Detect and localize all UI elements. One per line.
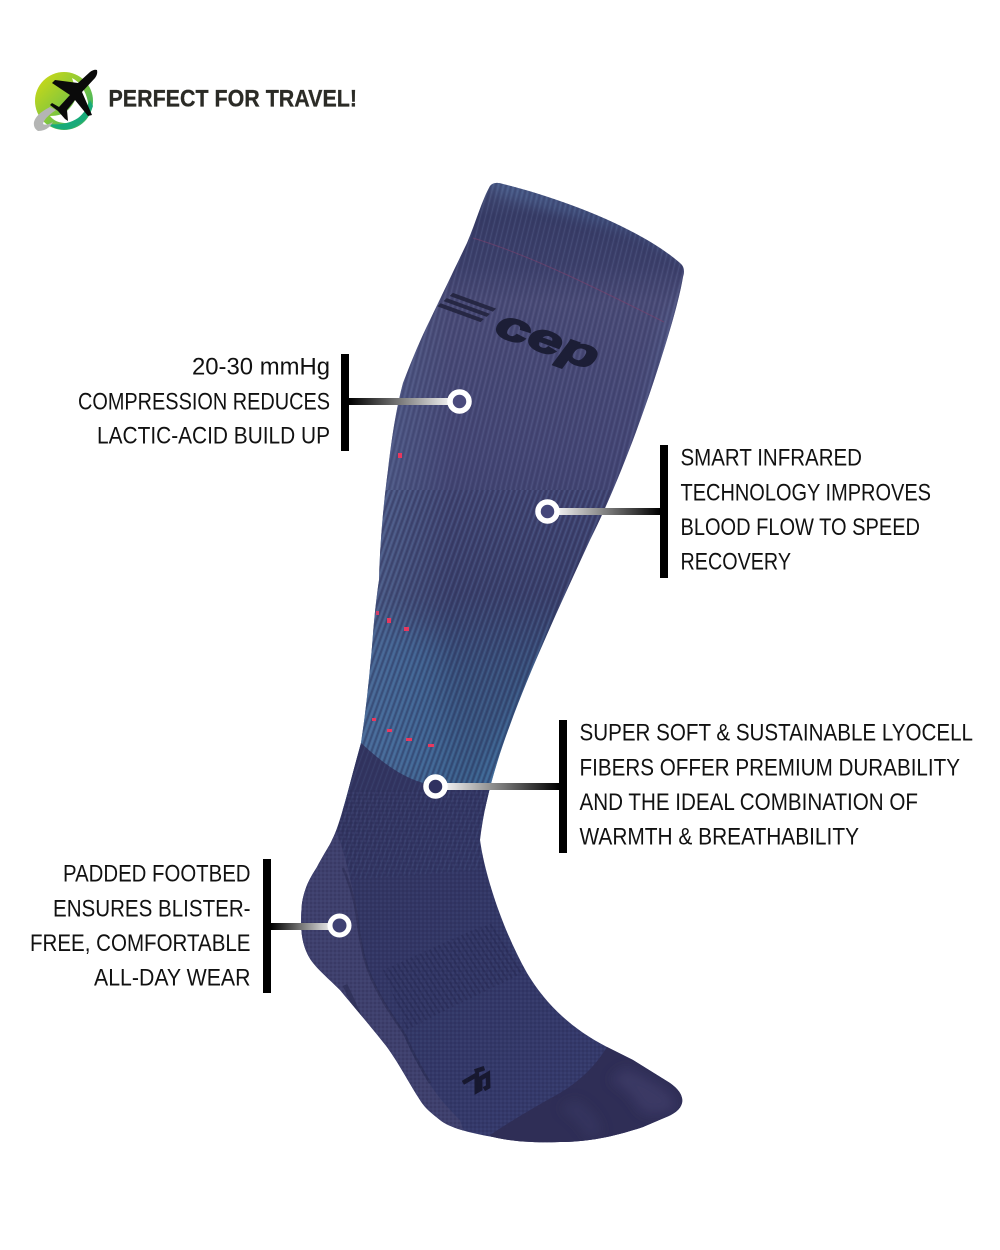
callout: lyocell xyxy=(426,720,973,853)
text: compression xyxy=(78,354,330,450)
text: footbed: ENSURES BLISTER- xyxy=(53,896,250,922)
pointer: footbed xyxy=(263,859,349,993)
callout: compression xyxy=(78,354,469,451)
text: lyocell: AND THE IDEAL COMBINATION OF xyxy=(580,789,918,816)
text: lyocell xyxy=(580,720,973,850)
infrared marks xyxy=(372,453,434,747)
callout: infrared xyxy=(538,444,931,578)
text: footbed: PADDED FOOTBED xyxy=(63,860,250,888)
pointer: lyocell xyxy=(426,720,567,853)
pointer: compression xyxy=(341,354,469,451)
size mark on foot xyxy=(461,1066,493,1097)
text: infrared: RECOVERY xyxy=(680,548,791,576)
text: compression: LACTIC-ACID BUILD UP xyxy=(97,422,330,450)
text: footbed: ALL-DAY WEAR xyxy=(94,964,250,992)
text: infrared xyxy=(680,444,931,576)
leg section xyxy=(342,182,684,810)
text: compression: COMPRESSION REDUCES xyxy=(78,388,330,416)
foot section xyxy=(301,743,682,1142)
logo: cep: cep xyxy=(490,301,605,379)
icon: globe with plane xyxy=(34,70,97,131)
toe section xyxy=(490,1047,682,1142)
heading: PERFECT FOR TRAVEL! xyxy=(108,86,357,112)
pointer: infrared xyxy=(538,445,668,578)
callout: footbed xyxy=(30,859,349,993)
text: footbed: FREE, COMFORTABLE xyxy=(30,930,250,957)
text: compression: 20-30 mmHg xyxy=(192,354,330,380)
logo: cep xyxy=(432,280,605,379)
sock xyxy=(301,182,684,1142)
header: perfect for travel xyxy=(34,70,357,131)
text: infrared: SMART INFRARED xyxy=(680,444,862,472)
text: footbed xyxy=(30,860,250,992)
text: lyocell: WARMTH & BREATHABILITY xyxy=(580,824,859,850)
text: infrared: BLOOD FLOW TO SPEED xyxy=(680,514,920,541)
text: infrared: TECHNOLOGY IMPROVES xyxy=(680,480,931,506)
